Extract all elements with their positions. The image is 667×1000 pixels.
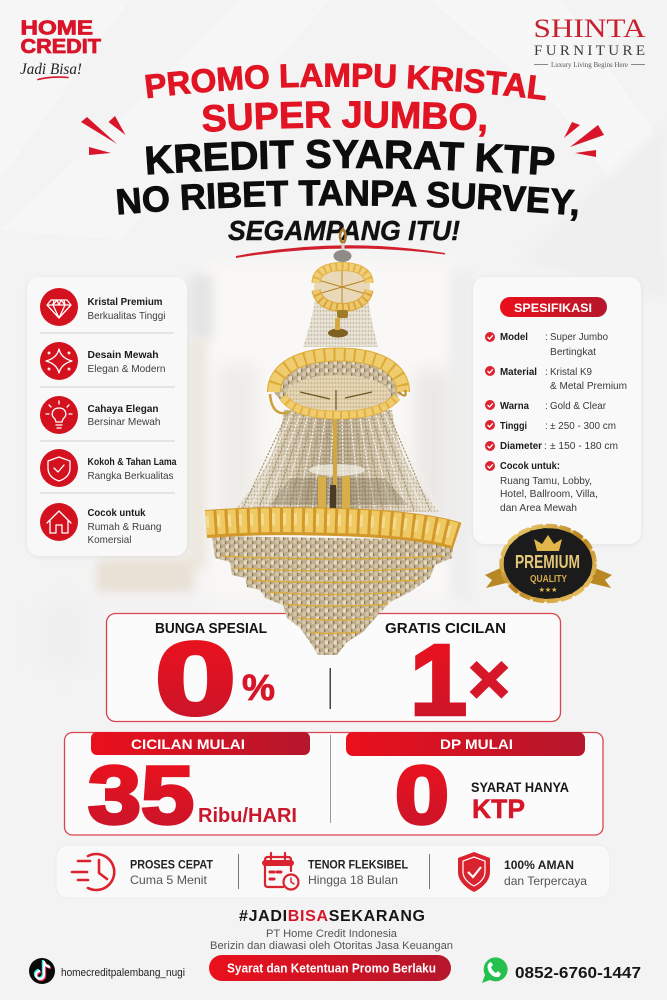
number: 35 thousand per day: Ribu/HARI bbox=[198, 805, 297, 827]
feature: Cocok untuk: Rumah & Ruang bbox=[88, 521, 162, 533]
spec text: dan Area Mewah bbox=[500, 503, 577, 514]
spec text: ± 250 - 300 cm bbox=[550, 421, 616, 432]
note: Syarat hanya KTP: KTP bbox=[472, 794, 525, 824]
badge: premium quality: QUALITY bbox=[530, 573, 567, 585]
spec text: Tinggi bbox=[500, 421, 527, 432]
spec text: : bbox=[544, 441, 547, 452]
icon: tiktok bbox=[29, 958, 55, 984]
chandelier upper skirt bbox=[303, 300, 378, 347]
logo: Shinta Furniture: Luxury Living Begins Here bbox=[551, 61, 628, 69]
spec text: Material bbox=[500, 367, 537, 378]
spec text: Super Jumbo bbox=[550, 332, 608, 343]
spec text: Bertingkat bbox=[550, 347, 596, 358]
spec text: ± 150 - 180 cm bbox=[550, 441, 618, 452]
chandelier top ring bbox=[314, 266, 370, 338]
note: Syarat hanya KTP bbox=[471, 779, 569, 824]
feature: Desain Mewah: Elegan & Modern bbox=[88, 363, 166, 375]
icon: fast clock bbox=[72, 854, 114, 890]
spec text: : bbox=[545, 421, 548, 432]
whatsapp contact bbox=[482, 957, 641, 983]
pill: Cicilan Mulai bbox=[91, 732, 310, 755]
feature: Kokoh dan Tahan Lama: Kokoh & Tahan Lama bbox=[88, 456, 177, 468]
legal text: PT Home Credit Indonesia bbox=[266, 928, 398, 940]
logo: Home Credit: HOME bbox=[20, 18, 93, 40]
icon: calendar clock bbox=[265, 853, 298, 890]
spec text: Cocok untuk: bbox=[500, 461, 560, 472]
panel: promo top bbox=[106, 614, 560, 736]
badge: premium quality: ★★★ bbox=[539, 586, 557, 594]
cta pill: Syarat dan Ketentuan Promo Berlaku bbox=[227, 962, 436, 976]
spec text: : bbox=[545, 401, 548, 412]
feature: Kristal Premium: Berkualitas Tinggi bbox=[88, 310, 166, 322]
logo: Shinta Furniture: FURNITURE bbox=[534, 43, 645, 59]
spec heading pill: SPESIFIKASI bbox=[514, 301, 592, 315]
feature: Cocok untuk: Komersial bbox=[88, 534, 132, 546]
feature: Kristal Premium: Kristal Premium bbox=[88, 296, 162, 308]
spec text: Gold & Clear bbox=[550, 401, 607, 412]
headline line: No Ribet Tanpa Survey: NO RIBET TANPA SURVEY, bbox=[116, 180, 578, 222]
number: 35 thousand per day: 35 bbox=[88, 750, 194, 841]
feature: Cocok untuk bbox=[40, 503, 162, 546]
legal text: Berizin dan diawasi oleh Otoritas Jasa Keuangan bbox=[210, 940, 453, 952]
spec text: Kristal K9 bbox=[550, 367, 592, 378]
number: 0 percent: % bbox=[242, 667, 275, 708]
number: 1x: × bbox=[468, 640, 510, 718]
panel: benefits strip bbox=[56, 845, 610, 898]
benefit: 100% Aman bbox=[458, 852, 587, 892]
icon: sparks left bbox=[81, 116, 126, 155]
benefit: Tenor Fleksibel: TENOR FLEKSIBEL bbox=[308, 858, 408, 872]
number: 35 thousand per day bbox=[88, 750, 297, 841]
spec text: Ruang Tamu, Lobby, bbox=[500, 476, 592, 487]
spec heading pill bbox=[500, 297, 607, 317]
headline line: Kredit Syarat KTP: KREDIT SYARAT KTP bbox=[146, 139, 554, 175]
label: Bunga Spesial: BUNGA SPESIAL bbox=[155, 620, 267, 637]
feature: Kristal Premium bbox=[40, 288, 166, 326]
number: 1x: 1 bbox=[410, 624, 467, 736]
pill: DP Mulai: DP MULAI bbox=[440, 736, 513, 752]
number: 0 percent bbox=[155, 621, 275, 736]
badge ribbons bbox=[485, 566, 612, 588]
headline line: Super Jumbo: SUPER JUMBO, bbox=[202, 101, 486, 137]
spec text: : bbox=[545, 332, 548, 343]
label: Gratis Cicilan: GRATIS CICILAN bbox=[385, 620, 506, 637]
number: DP 0: 0 bbox=[395, 750, 449, 841]
pill: Cicilan Mulai: CICILAN MULAI bbox=[131, 736, 245, 752]
cta pill bbox=[209, 955, 451, 981]
chandelier hook bbox=[334, 229, 352, 262]
title bbox=[116, 63, 578, 258]
spec text: Diameter bbox=[500, 441, 542, 452]
chandelier lights and column bbox=[270, 410, 408, 509]
benefit: Proses Cepat: Cuma 5 Menit bbox=[130, 873, 208, 887]
feature: Desain Mewah: Desain Mewah bbox=[88, 349, 158, 361]
number: 1x bbox=[410, 624, 510, 736]
benefit: Proses Cepat: PROSES CEPAT bbox=[130, 858, 214, 872]
icon: sparks right bbox=[564, 122, 604, 157]
logo: Shinta Furniture: SHINTA bbox=[534, 14, 646, 43]
spec bullets bbox=[485, 332, 495, 471]
feature: Desain Mewah bbox=[40, 342, 166, 380]
badge: premium quality bbox=[485, 526, 612, 601]
badge crown bbox=[534, 535, 562, 551]
feature: Kokoh dan Tahan Lama: Rangka Berkualitas bbox=[88, 470, 174, 482]
benefit: 100% Aman: dan Terpercaya bbox=[504, 874, 587, 888]
chandelier crystal strands bbox=[234, 412, 438, 510]
legal text bbox=[210, 928, 453, 952]
feature: Cahaya Elegan: Bersinar Mewah bbox=[88, 416, 161, 428]
feature: Kokoh dan Tahan Lama bbox=[40, 449, 177, 487]
panel: features bbox=[27, 277, 187, 556]
hashtag: #JADIBISASEKARANG bbox=[239, 908, 425, 925]
chandelier big ring bbox=[206, 519, 457, 536]
benefit: Tenor Fleksibel: Hingga 18 Bulan bbox=[308, 873, 398, 887]
tiktok handle bbox=[29, 958, 185, 984]
pill: DP Mulai bbox=[346, 732, 585, 756]
logo: Home Credit: Jadi Bisa! bbox=[20, 61, 82, 78]
logo: Home Credit: CREDIT bbox=[20, 36, 101, 58]
chandelier lower cone bbox=[212, 536, 454, 655]
spec text: Model bbox=[500, 332, 528, 343]
whatsapp contact: 0852-6760-1447 bbox=[515, 965, 641, 982]
icon: shield bbox=[458, 852, 490, 892]
badge: premium quality: PREMIUM bbox=[515, 552, 580, 572]
feature: Cahaya Elegan bbox=[40, 396, 161, 434]
benefit: 100% Aman: 100% AMAN bbox=[504, 858, 574, 872]
spec text: & Metal Premium bbox=[550, 381, 627, 392]
spec text bbox=[500, 332, 627, 514]
chandelier bbox=[206, 229, 457, 655]
icon: whatsapp bbox=[482, 957, 508, 983]
headline line: Segampang Itu: SEGAMPANG ITU! bbox=[228, 215, 460, 246]
headline line: Promo Lampu Kristal: PROMO LAMPU KRISTAL bbox=[145, 63, 546, 100]
chandelier main skirt bbox=[232, 410, 440, 512]
number: 0 percent: 0 bbox=[155, 621, 236, 736]
spec text: Hotel, Ballroom, Villa, bbox=[500, 489, 598, 500]
underline swoosh bbox=[236, 245, 445, 258]
feature: Cahaya Elegan: Cahaya Elegan bbox=[88, 403, 158, 415]
note: Syarat hanya KTP: SYARAT HANYA bbox=[471, 779, 569, 795]
logo: Shinta Furniture bbox=[534, 14, 646, 69]
benefit: Tenor Fleksibel bbox=[265, 853, 408, 890]
panel: specifications bbox=[473, 277, 641, 544]
spec text: : bbox=[545, 367, 548, 378]
chandelier middle ring bbox=[270, 352, 406, 416]
panel: promo bottom bbox=[64, 732, 603, 841]
logo: Home Credit bbox=[20, 18, 101, 80]
tiktok handle: homecreditpalembang_nugi bbox=[61, 967, 185, 979]
feature: Cocok untuk: Cocok untuk bbox=[88, 507, 146, 519]
benefit: Proses Cepat bbox=[72, 854, 214, 890]
spec text: Warna bbox=[500, 401, 529, 412]
